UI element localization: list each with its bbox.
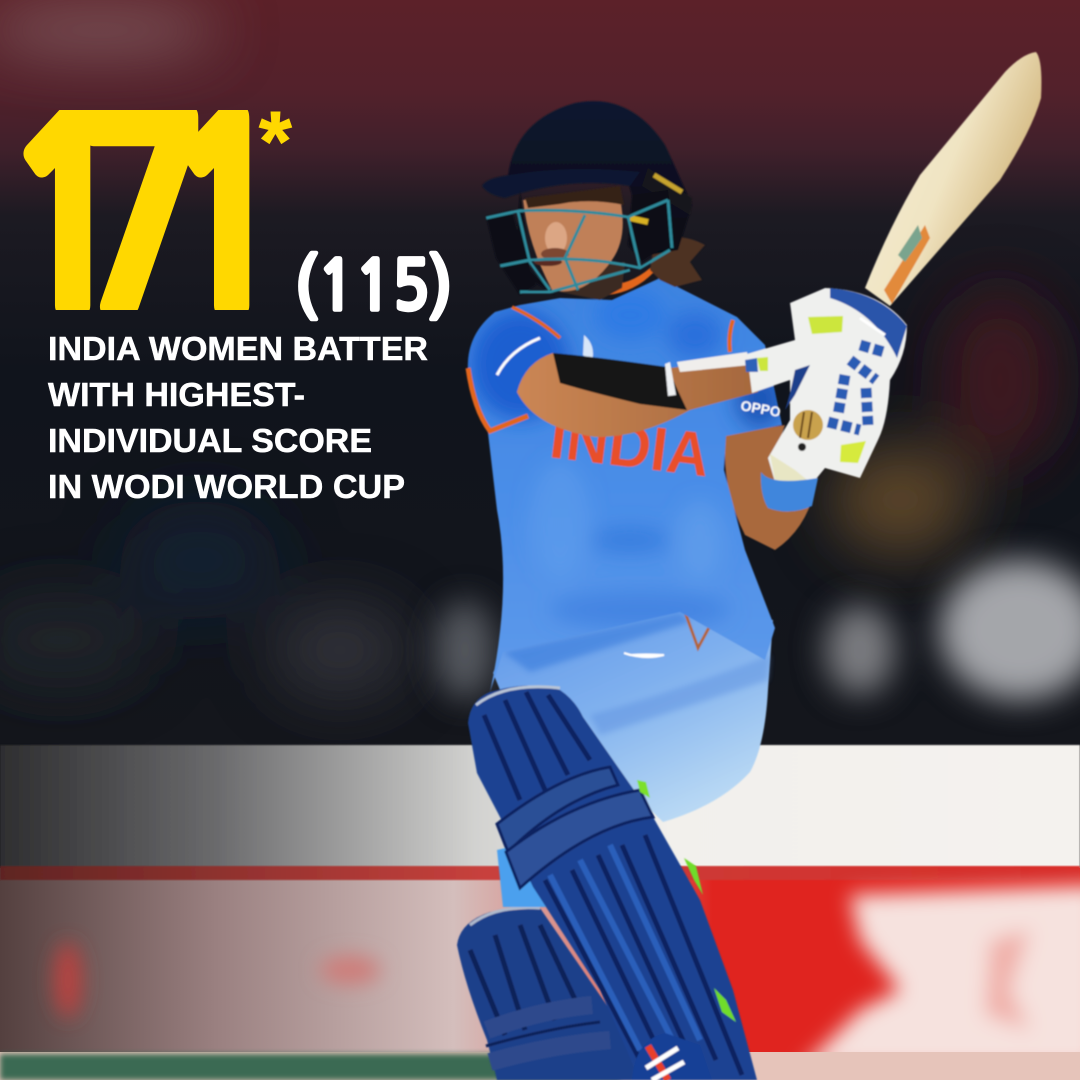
lower arm	[725, 425, 815, 550]
description text: IN WODI WORLD CUP	[48, 468, 405, 505]
description text: INDIVIDUAL SCORE	[48, 422, 372, 459]
neck	[560, 262, 625, 300]
description text	[48, 330, 428, 505]
sponsor text: OPPO	[739, 397, 782, 420]
front pad	[468, 685, 757, 1080]
trousers	[493, 610, 773, 822]
player	[457, 52, 1041, 1080]
bat	[865, 52, 1041, 306]
headline number: 171	[1, 91, 293, 347]
description text: INDIA WOMEN BATTER	[48, 330, 428, 367]
asterisk: *	[259, 94, 292, 188]
gloves	[745, 288, 907, 484]
helmet	[482, 101, 692, 295]
back pad	[457, 908, 640, 1080]
logo	[632, 1033, 712, 1080]
face	[523, 186, 624, 291]
description text: WITH HIGHEST-	[48, 376, 305, 413]
lower leg behind	[497, 840, 550, 907]
upper arm	[517, 353, 758, 437]
grille	[486, 200, 672, 292]
wristband	[761, 472, 818, 512]
balls faced: (115)	[295, 251, 452, 321]
shirt	[468, 268, 784, 692]
hair	[650, 237, 705, 287]
jersey text: INDIA	[546, 402, 714, 490]
